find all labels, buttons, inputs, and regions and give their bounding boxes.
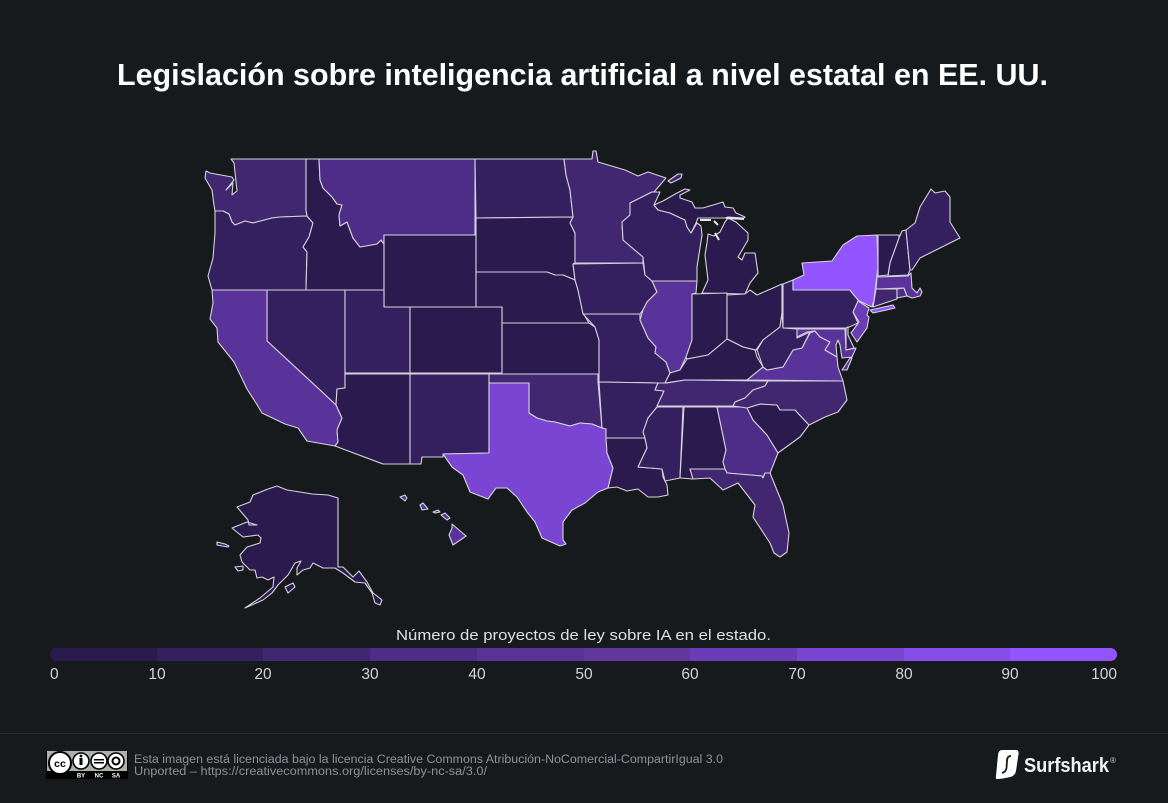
state: Pennsylvania: [783, 280, 859, 328]
state: Delaware: [846, 327, 854, 350]
state: Colorado: [410, 307, 502, 373]
choropleth map of US states: [205, 151, 960, 608]
state: Massachusetts: [876, 273, 922, 298]
legend scale labels: [50, 666, 1117, 683]
legend scale labels: 60: [681, 666, 699, 683]
legend title: Número de proyectos de ley sobre IA en el estado.: [396, 627, 771, 644]
state: Nebraska: [476, 272, 589, 323]
state: Georgia: [717, 407, 778, 478]
state: Montana: [319, 159, 475, 247]
Surfshark logo: Surfshark: [1024, 754, 1110, 777]
state: North Dakota: [475, 159, 573, 218]
legend scale labels: 20: [254, 666, 272, 683]
icon: creative commons licence badge: SA: [112, 774, 121, 780]
state: Louisiana: [606, 438, 668, 497]
state: Alaska: [232, 486, 382, 608]
state: Kansas: [502, 323, 599, 374]
state: California: [210, 290, 342, 446]
legend scale labels: 90: [1001, 666, 1019, 683]
legend scale labels: 80: [895, 666, 913, 683]
state: Missouri: [583, 314, 670, 383]
detail: straits of Mackinac islands: [700, 218, 744, 240]
state: Rhode Island: [897, 288, 907, 298]
state: New York: [793, 235, 878, 307]
state: Idaho: [303, 159, 384, 290]
state: Alabama: [680, 407, 726, 479]
licence text: Esta imagen está licenciada bajo la licencia Creative Commons Atribución-NoComercial-CompartirIgual 3.0: [134, 754, 723, 766]
island: Kodiak: [285, 583, 295, 593]
island: Nunivak: [235, 566, 243, 571]
island: Aleutian: [217, 542, 229, 547]
state: Oregon: [208, 211, 313, 290]
state: Michigan upper: [654, 189, 745, 233]
state: Iowa: [573, 263, 657, 314]
state: West Virginia: [757, 313, 810, 370]
legend scale labels: 100: [1091, 666, 1117, 683]
island: Isle Royale: [668, 174, 682, 183]
state: New Mexico: [410, 374, 489, 464]
state: Maryland: [797, 329, 856, 358]
legend scale labels: 10: [148, 666, 166, 683]
licence text: [134, 754, 723, 778]
state: Wyoming: [384, 235, 476, 307]
state: Illinois: [640, 281, 697, 373]
state: Indiana: [686, 293, 727, 359]
legend colour bar: [50, 648, 1117, 661]
state: Arizona: [335, 374, 410, 464]
state: Vermont: [878, 235, 899, 276]
state: Arkansas: [599, 382, 664, 438]
state: Kentucky: [665, 339, 763, 383]
licence text: Unported – https://creativecommons.org/licenses/by-nc-sa/3.0/: [134, 766, 488, 778]
legend scale labels: 30: [361, 666, 379, 683]
state: Utah: [345, 290, 410, 373]
state: Minnesota: [564, 151, 666, 263]
state: Long Island: [870, 305, 895, 313]
state: Nevada: [267, 290, 345, 405]
title: Legislación sobre inteligencia artificial a nivel estatal en EE. UU.: [117, 57, 1048, 92]
legend scale labels: 40: [468, 666, 486, 683]
state: Virginia eastern shore: [842, 358, 852, 370]
state: Texas: [443, 383, 613, 546]
state: New Hampshire: [888, 230, 910, 276]
state: South Carolina: [747, 404, 809, 453]
Surfshark logo: ®: [1110, 756, 1116, 765]
state: Michigan lower: [702, 218, 758, 294]
state: Ohio: [727, 284, 782, 350]
state: Maine: [906, 189, 960, 270]
Surfshark logo: [996, 750, 1116, 779]
state: Washington: [205, 159, 307, 225]
state: Florida: [690, 469, 789, 557]
icon: creative commons licence badge: NC: [95, 774, 104, 780]
state: Mississippi: [638, 407, 683, 481]
legend scale labels: 70: [788, 666, 806, 683]
state: Wisconsin: [622, 192, 702, 281]
state: New Jersey: [851, 301, 869, 342]
state: Hawaii: [400, 495, 466, 545]
state: Connecticut: [873, 289, 897, 307]
state: Tennessee: [655, 380, 768, 406]
state: North Carolina: [733, 381, 847, 425]
icon: creative commons licence badge: [46, 751, 128, 780]
state: Oklahoma: [489, 374, 602, 428]
state: South Dakota: [476, 217, 575, 280]
legend scale labels: 50: [575, 666, 593, 683]
icon: creative commons licence badge: cc: [54, 758, 66, 770]
legend scale labels: 0: [50, 666, 59, 683]
state: Virginia: [747, 331, 843, 381]
icon: creative commons licence badge: BY: [77, 774, 85, 780]
